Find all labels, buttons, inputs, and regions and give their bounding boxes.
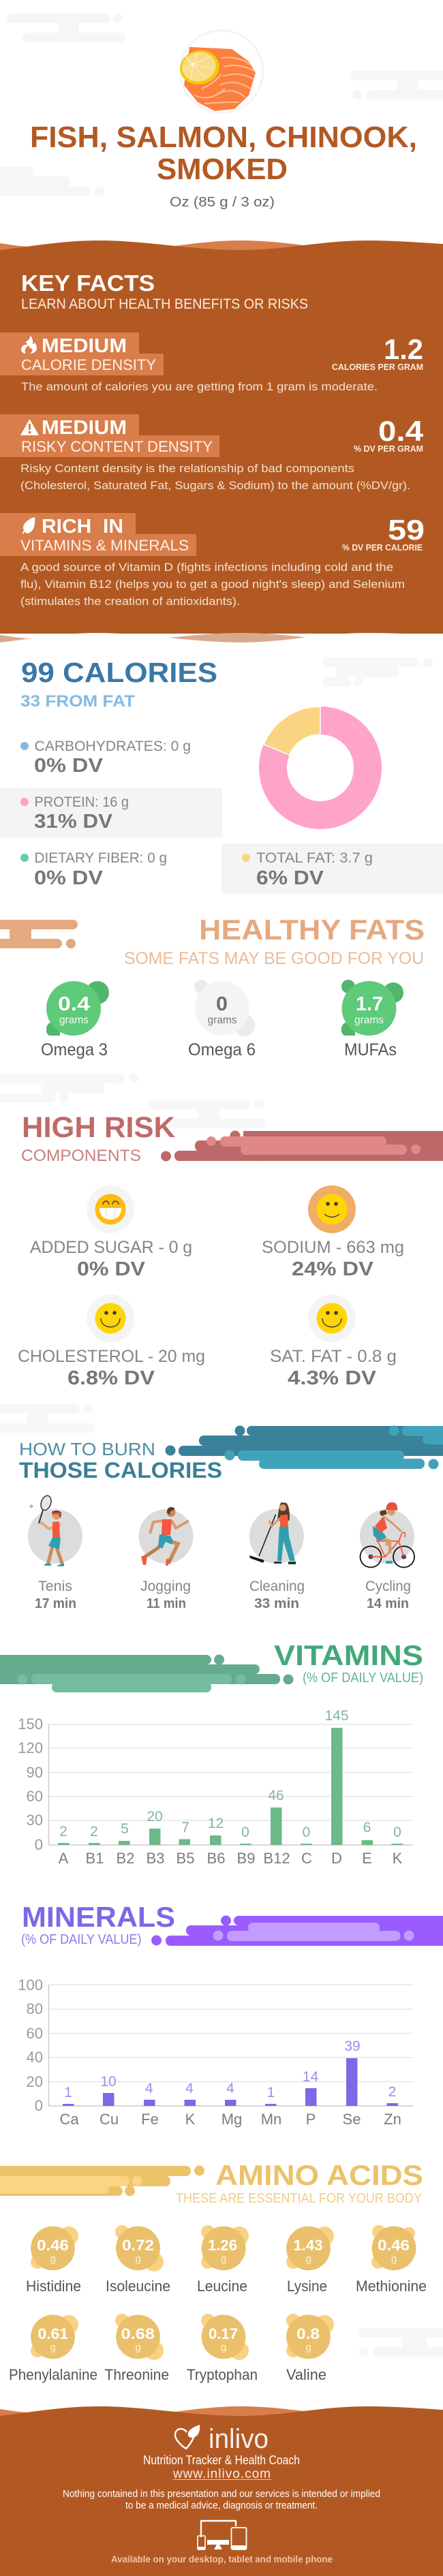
panel: key facts — [0, 240, 443, 654]
activity: tennis: Tenis — [38, 1579, 72, 1594]
value labels: 20 — [147, 1809, 163, 1825]
category labels: Mg — [222, 2111, 242, 2128]
item: total fat: 6% DV — [256, 867, 324, 889]
activity: cycling — [360, 1502, 414, 1611]
fact: calorie density: 1.2 — [384, 333, 423, 365]
value labels: 2 — [90, 1824, 98, 1840]
stat: omega 3: Omega 3 — [41, 1040, 108, 1059]
title: FISH, SALMON, CHINOOK, — [30, 121, 417, 154]
stat: isoleucine: g — [135, 2253, 141, 2265]
stat: omega 6: 0 — [216, 993, 228, 1015]
panel: amino acids — [0, 2159, 443, 2383]
category labels: A — [59, 1850, 69, 1867]
stat: leucine: Leucine — [197, 2278, 247, 2295]
fact: calorie density: CALORIE DENSITY — [21, 356, 156, 373]
fact: rich in vitamins and minerals — [0, 513, 425, 608]
stat: valine — [286, 2314, 334, 2383]
stat: mufas — [341, 980, 403, 1059]
decoration: healthy fats blob — [0, 920, 78, 948]
value labels: 4 — [226, 2081, 234, 2096]
decoration: amino acids blob — [0, 2165, 204, 2197]
stat: methionine: g — [391, 2253, 397, 2265]
decoration: vitamins blob — [0, 1654, 293, 1692]
stat: histidine: 0.46 — [37, 2237, 69, 2254]
panel: vitamins — [0, 1639, 423, 1867]
fact: risky content density — [0, 414, 424, 492]
value labels: 0 — [393, 1825, 401, 1840]
stat: phenylalanine: Phenylalanine — [9, 2366, 97, 2383]
category labels: Zn — [384, 2111, 401, 2128]
item: carbohydrates: CARBOHYDRATES: 0 g — [34, 739, 191, 754]
fact: risky content density: MEDIUM — [42, 417, 127, 439]
icon: leaf — [22, 517, 35, 534]
icon: smiling face — [316, 1194, 348, 1225]
item: sodium: SODIUM - 663 mg — [262, 1238, 404, 1257]
item: saturated fat: 4.3% DV — [288, 1367, 377, 1389]
y axis labels: 80 — [27, 2000, 43, 2017]
value labels — [59, 1708, 401, 1840]
stat: methionine: Methionine — [356, 2278, 427, 2295]
fact: calorie density — [0, 332, 423, 393]
item: protein: PROTEIN: 16 g — [34, 794, 129, 810]
heading: high risk — [21, 1111, 175, 1165]
decoration: burn blob — [165, 1425, 443, 1469]
decoration: high risk blob — [161, 1131, 443, 1161]
decoration: minerals blob — [151, 1916, 443, 1946]
category labels: Se — [343, 2111, 361, 2128]
stat: leucine — [197, 2225, 249, 2295]
panel: calories — [0, 657, 443, 894]
heading: amino acids — [176, 2159, 423, 2206]
icon: jogger — [141, 1507, 189, 1566]
stat: mufas: grams — [354, 1014, 384, 1026]
text: disclaimer: Nothing contained in this presentation and our services is intended or implied — [63, 2488, 380, 2500]
y axis labels: 150 — [18, 1716, 43, 1733]
stat: methionine: 0.46 — [378, 2237, 410, 2254]
stat: omega 3: grams — [59, 1014, 89, 1026]
fact: risky content density: RISKY CONTENT DENSITY — [21, 438, 213, 455]
fact: rich in vitamins and minerals: flu), Vitamin B12 (helps you to get a good night's sleep) and Selenium — [20, 578, 405, 591]
stat: mufas: 1.7 — [356, 993, 383, 1015]
item: carbohydrates — [20, 739, 191, 777]
value labels: 46 — [268, 1788, 284, 1803]
activity: jogging: Jogging — [140, 1579, 191, 1594]
category labels: B1 — [86, 1850, 104, 1867]
heading: 99 calories: 99 CALORIES — [21, 657, 217, 688]
icon: warning triangle — [20, 419, 39, 435]
y axis labels — [18, 1976, 43, 2114]
heading: minerals: MINERALS — [22, 1901, 175, 1933]
y axis labels: 40 — [27, 2049, 43, 2066]
icon: cyclist — [360, 1502, 414, 1567]
stat: threonine: Threonine — [105, 2366, 169, 2383]
value labels: 7 — [181, 1820, 189, 1835]
activity: tennis — [28, 1494, 82, 1611]
stat: valine: Valine — [286, 2366, 326, 2383]
heading: minerals — [21, 1901, 175, 1947]
chart: minerals bar chart — [18, 1976, 413, 2128]
heading: key facts: KEY FACTS — [21, 270, 155, 296]
fact: rich in vitamins and minerals: (stimulates the creation of antioxidants). — [20, 595, 240, 608]
panel: footer — [0, 2406, 443, 2576]
heading: high risk: HIGH RISK — [22, 1111, 175, 1144]
stat: omega 6 — [188, 980, 256, 1059]
stat: threonine: 0.68 — [121, 2325, 155, 2342]
value labels: 0 — [241, 1825, 249, 1840]
value labels: 4 — [145, 2081, 153, 2096]
stat: isoleucine: Isoleucine — [106, 2278, 170, 2295]
value labels: 2 — [388, 2084, 396, 2100]
category labels: K — [393, 1850, 403, 1867]
item: dietary fiber — [20, 850, 167, 889]
category labels: B9 — [237, 1850, 255, 1867]
heading: 99 calories: 33 FROM FAT — [20, 692, 135, 711]
chart: calorie donut — [264, 707, 368, 815]
activity: jogging: 11 min — [147, 1596, 186, 1611]
fact: rich in vitamins and minerals: % DV PER CALORIE — [342, 542, 423, 553]
category labels: E — [362, 1850, 372, 1867]
stat: isoleucine — [106, 2225, 170, 2295]
y axis labels: 60 — [27, 2025, 43, 2042]
value labels: 4 — [185, 2081, 194, 2096]
item: protein — [0, 788, 222, 837]
y axis labels — [18, 1716, 43, 1853]
stat: leucine: g — [221, 2253, 226, 2265]
category labels: B2 — [117, 1850, 134, 1867]
value labels: 1 — [64, 2085, 72, 2100]
stat: phenylalanine: 0.61 — [38, 2325, 68, 2342]
bars — [58, 1728, 403, 1845]
text: disclaimer: to be a medical advice, diagnosis or treatment. — [125, 2500, 318, 2511]
icon: smiling face — [316, 1303, 348, 1334]
heading: how to burn those calories: HOW TO BURN — [19, 1439, 155, 1459]
icon: flame — [21, 335, 37, 354]
stat: lysine: 1.43 — [293, 2237, 323, 2254]
value labels: 14 — [303, 2069, 319, 2085]
category labels: Mn — [261, 2111, 281, 2128]
panel: header — [0, 14, 443, 210]
value labels: 0 — [303, 1825, 310, 1840]
stat: tryptophan: Tryptophan — [187, 2366, 258, 2383]
panel: high risk components — [0, 1074, 443, 1389]
heading: high risk: COMPONENTS — [21, 1147, 141, 1165]
fact: rich in vitamins and minerals: VITAMINS & MINERALS — [20, 537, 189, 554]
item: dietary fiber: 0% DV — [34, 867, 104, 889]
item: saturated fat: SAT. FAT - 0.8 g — [270, 1347, 397, 1366]
stat: valine: 0.8 — [296, 2325, 320, 2342]
category labels: B3 — [147, 1850, 164, 1867]
item: total fat — [222, 843, 443, 894]
category labels: B12 — [263, 1850, 290, 1867]
item: protein: 31% DV — [34, 811, 113, 833]
stat: lysine: g — [305, 2253, 311, 2265]
panel: minerals — [18, 1901, 443, 2128]
title: SMOKED — [157, 153, 288, 186]
y axis labels: 100 — [18, 1976, 43, 1993]
stat: phenylalanine: g — [50, 2342, 56, 2353]
category labels: P — [306, 2111, 316, 2128]
y axis labels: 0 — [35, 1836, 43, 1853]
stat: threonine — [105, 2314, 169, 2383]
value labels: 2 — [59, 1824, 67, 1840]
fact: risky content density: (Cholesterol, Saturated Fat, Sugars & Sodium) to the amount (%DV/gr). — [20, 479, 410, 492]
stat: histidine: g — [50, 2253, 56, 2265]
panel: how to burn calories — [0, 1404, 443, 1611]
bars — [63, 2058, 398, 2106]
fact: calorie density: CALORIES PER GRAM — [332, 362, 423, 372]
category labels: C — [301, 1850, 312, 1867]
y axis labels: 90 — [27, 1764, 43, 1781]
category labels: K — [185, 2111, 196, 2128]
value labels: 6 — [363, 1820, 371, 1835]
fact: rich in vitamins and minerals: A good source of Vitamin D (fights infections including cold and the — [20, 561, 393, 574]
item: cholesterol — [18, 1294, 205, 1389]
stat: lysine — [286, 2226, 334, 2295]
heading: key facts — [21, 270, 308, 312]
y axis labels: 30 — [27, 1812, 43, 1829]
text: tagline: Nutrition Tracker & Health Coach — [143, 2453, 300, 2467]
y axis labels: 120 — [18, 1739, 43, 1756]
value labels: 12 — [208, 1816, 224, 1831]
category labels: Cu — [100, 2111, 119, 2128]
value labels: 145 — [324, 1708, 349, 1724]
fact: rich in vitamins and minerals: 59 — [388, 514, 425, 546]
category labels: B6 — [207, 1850, 225, 1867]
activity: cycling: Cycling — [365, 1579, 411, 1594]
stat: tryptophan: 0.17 — [209, 2325, 238, 2342]
y axis labels: 60 — [27, 1788, 43, 1805]
title — [30, 121, 417, 186]
fact: calorie density: The amount of calories you are getting from 1 gram is moderate. — [21, 380, 378, 393]
stat: phenylalanine — [9, 2315, 97, 2383]
stat: omega 6: Omega 6 — [188, 1040, 256, 1059]
heading: how to burn those calories — [19, 1439, 222, 1483]
value labels: 39 — [344, 2038, 361, 2054]
stat: omega 3: 0.4 — [58, 993, 90, 1015]
heading: amino acids: THESE ARE ESSENTIAL FOR YOUR BODY — [176, 2191, 422, 2206]
value labels — [64, 2038, 396, 2100]
fact: risky content density: Risky Content density is the relationship of bad components — [20, 462, 354, 475]
value labels: 1 — [267, 2085, 275, 2100]
chart: vitamins bar chart — [18, 1708, 413, 1867]
stat: tryptophan — [187, 2314, 258, 2383]
icon: person sweeping — [249, 1502, 296, 1564]
fact: rich in vitamins and minerals: RICH IN — [42, 516, 123, 538]
activity: cleaning: 33 min — [254, 1596, 299, 1611]
text: disclaimer — [63, 2488, 380, 2511]
fact: risky content density: % DV PER GRAM — [354, 444, 423, 454]
stat: omega 6: grams — [207, 1014, 237, 1026]
item: carbohydrates: 0% DV — [34, 755, 104, 777]
heading: healthy fats — [124, 914, 425, 968]
y axis labels: 0 — [35, 2097, 43, 2114]
item: saturated fat — [270, 1294, 397, 1389]
item: cholesterol: 6.8% DV — [67, 1367, 155, 1389]
stat: histidine — [26, 2226, 81, 2295]
heading: healthy fats: HEALTHY FATS — [199, 914, 425, 946]
icon: salmon with lemon photo — [177, 30, 263, 113]
activity: cleaning — [249, 1502, 305, 1611]
activity: jogging — [139, 1507, 194, 1611]
stat: isoleucine: 0.72 — [122, 2237, 154, 2254]
stat: omega 3 — [41, 981, 109, 1059]
heading: healthy fats: SOME FATS MAY BE GOOD FOR YOU — [124, 949, 424, 968]
stat: threonine: g — [135, 2342, 141, 2353]
category labels: Fe — [141, 2111, 159, 2128]
activity: tennis: 17 min — [35, 1596, 76, 1611]
logo: inlivo — [175, 2424, 269, 2454]
activity: cycling: 14 min — [367, 1596, 409, 1611]
item: added sugar — [30, 1185, 192, 1280]
panel: healthy fats — [0, 914, 425, 1059]
stat: histidine: Histidine — [26, 2278, 81, 2295]
heading: vitamins: (% OF DAILY VALUE) — [303, 1671, 423, 1686]
stat: valine: g — [305, 2342, 311, 2353]
stat: methionine — [356, 2225, 427, 2295]
value labels: 5 — [121, 1821, 129, 1837]
fact: calorie density: MEDIUM — [42, 335, 127, 357]
value labels: 10 — [100, 2074, 117, 2090]
heading: key facts: LEARN ABOUT HEALTH BENEFITS OR RISKS — [21, 296, 308, 312]
item: added sugar: ADDED SUGAR - 0 g — [30, 1238, 192, 1257]
category labels — [60, 2111, 401, 2128]
y axis labels: 20 — [27, 2073, 43, 2090]
stat: mufas: MUFAs — [344, 1040, 397, 1059]
activity: cleaning: Cleaning — [249, 1579, 305, 1594]
item: sodium — [262, 1185, 404, 1280]
fact: risky content density: 0.4 — [378, 415, 424, 447]
icon: devices — [198, 2521, 247, 2550]
heading: amino acids: AMINO ACIDS — [215, 2159, 423, 2191]
heading: 99 calories — [20, 657, 217, 711]
category labels: B5 — [177, 1850, 194, 1867]
item: sodium: 24% DV — [292, 1258, 374, 1280]
stat: leucine: 1.26 — [208, 2237, 237, 2254]
item: added sugar: 0% DV — [77, 1258, 146, 1280]
link: website: www.inlivo.com — [172, 2467, 271, 2481]
stat: tryptophan: g — [221, 2342, 226, 2353]
item: dietary fiber: DIETARY FIBER: 0 g — [34, 850, 167, 866]
item: cholesterol: CHOLESTEROL - 20 mg — [18, 1347, 205, 1366]
heading: minerals: (% OF DAILY VALUE) — [21, 1932, 142, 1947]
icon: tennis player — [30, 1494, 64, 1566]
icon: smiling face — [95, 1303, 125, 1334]
item: total fat: TOTAL FAT: 3.7 g — [256, 850, 373, 866]
heading: how to burn those calories: THOSE CALORIES — [19, 1458, 222, 1483]
heading: vitamins: VITAMINS — [274, 1639, 423, 1671]
logo: inlivo: inlivo — [209, 2424, 269, 2454]
icon: grinning face — [95, 1194, 125, 1225]
category labels: Ca — [60, 2111, 79, 2128]
text: availability: Available on your desktop, tablet and mobile phone — [111, 2554, 333, 2564]
category labels: D — [331, 1850, 342, 1867]
heading: vitamins — [274, 1639, 423, 1686]
subtitle: serving size: Oz (85 g / 3 oz) — [170, 195, 275, 210]
category labels — [59, 1850, 403, 1867]
stat: lysine: Lysine — [287, 2278, 327, 2295]
